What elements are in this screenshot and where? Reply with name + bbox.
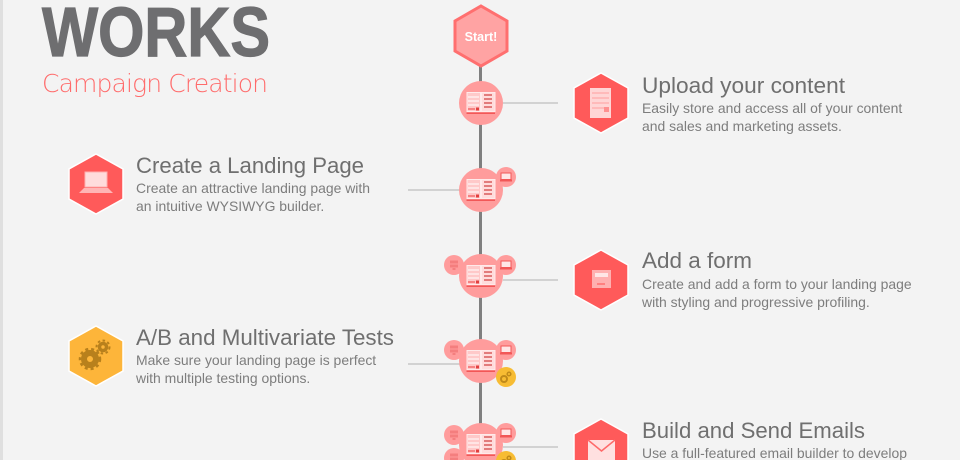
step: create a landing page: Create a Landing Page — [136, 153, 364, 178]
step: add a form: Create and add a form to your landing page — [642, 276, 912, 292]
node 4 — [444, 339, 516, 387]
step: upload your content: and sales and marketing assets. — [642, 118, 842, 134]
timeline spine — [479, 60, 482, 460]
step: a/b and multivariate tests: with multiple testing options. — [135, 370, 310, 386]
icon: form — [574, 250, 628, 310]
node 5 — [444, 423, 516, 460]
step: upload your content: Upload your content — [642, 73, 846, 98]
step: build and send emails: Build and Send Emails — [642, 418, 865, 443]
step: create a landing page — [69, 153, 370, 214]
step: a/b and multivariate tests: A/B and Multivariate Tests — [136, 325, 394, 350]
subtitle: Campaign Creation — [42, 69, 268, 98]
node 3 — [444, 254, 516, 298]
step: upload your content — [574, 73, 902, 134]
step: create a landing page: an intuitive WYSIWYG builder. — [136, 198, 324, 214]
icon: laptop — [69, 154, 123, 214]
step: add a form — [574, 248, 912, 310]
step: add a form: with styling and progressive profiling. — [641, 294, 870, 310]
icon: envelope — [574, 419, 628, 460]
step: add a form: Add a form — [642, 248, 752, 273]
connector lines — [408, 102, 558, 448]
step: a/b and multivariate tests — [69, 325, 394, 386]
node 2 — [459, 167, 516, 212]
start hexagon — [455, 6, 507, 66]
icon: document — [574, 73, 628, 133]
step: upload your content: Easily store and access all of your content — [642, 100, 902, 116]
step: create a landing page: Create an attractive landing page with — [136, 180, 370, 196]
node 1 — [459, 81, 503, 125]
start hexagon: Start! — [465, 30, 497, 44]
icon: gears — [69, 326, 123, 386]
step: build and send emails — [574, 418, 907, 460]
step: a/b and multivariate tests: Make sure your landing page is perfect — [136, 352, 376, 368]
